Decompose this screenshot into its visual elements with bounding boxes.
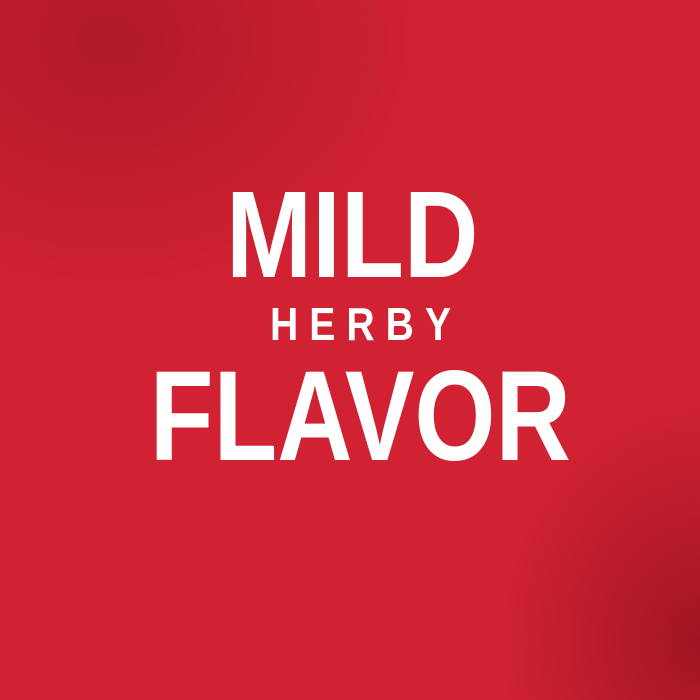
heading: MILD: MILD bbox=[226, 167, 478, 304]
subheading: HERBY: HERBY bbox=[270, 298, 462, 350]
heading: FLAVOR: FLAVOR bbox=[149, 345, 571, 488]
title: mild herby flavor bbox=[149, 167, 571, 488]
